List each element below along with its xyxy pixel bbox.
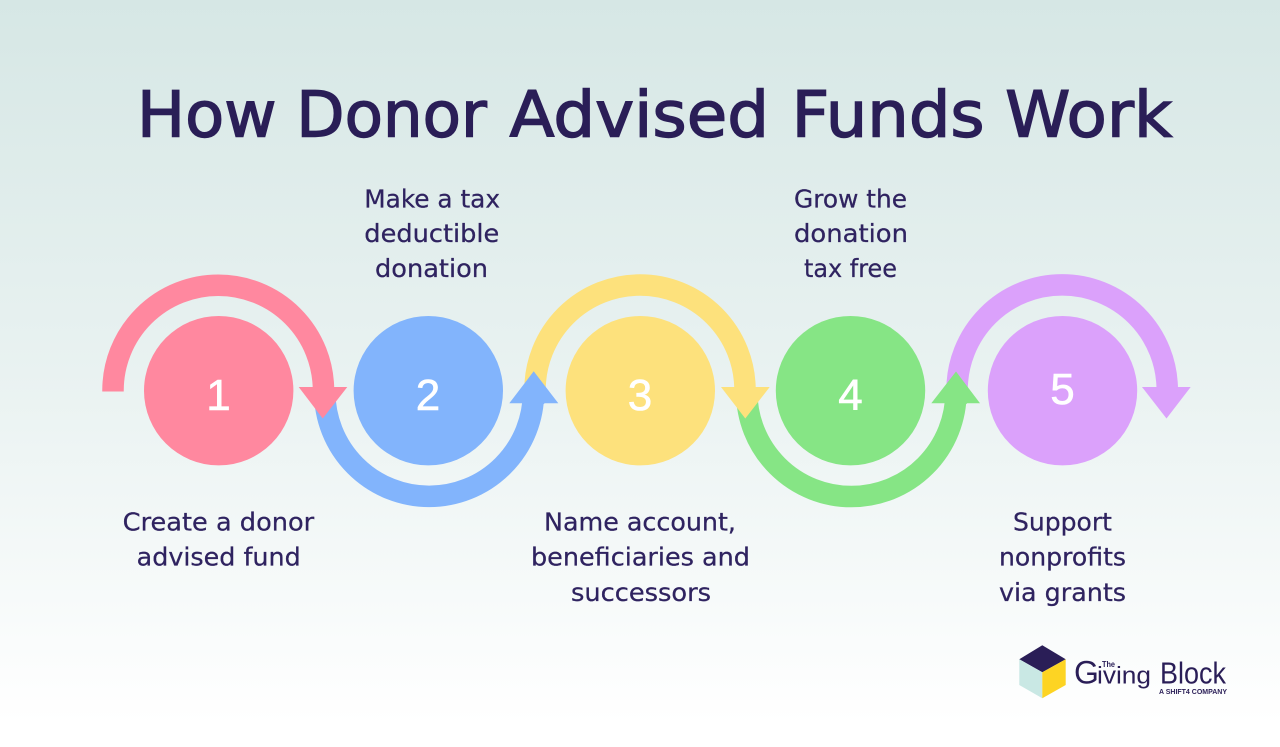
step 2 circle	[354, 316, 503, 465]
label: step 4: Grow the	[794, 184, 907, 213]
step 3 circle: 3	[628, 371, 652, 420]
label: step 5	[999, 508, 1126, 607]
label: step 5: nonprofits	[999, 543, 1126, 572]
label: step 5: via grants	[999, 578, 1126, 607]
title: Advised	[510, 79, 769, 152]
logo wordmark: G	[1074, 654, 1099, 690]
arrow 3: yellow arc	[535, 285, 770, 418]
logo wordmark	[1074, 654, 1227, 696]
arrow 2: blue arc	[325, 371, 558, 496]
logo wordmark: The	[1102, 660, 1115, 669]
label: step 2: Make a tax	[364, 184, 500, 213]
title	[137, 79, 1173, 152]
label: step 2	[364, 184, 500, 283]
step 5 circle	[988, 316, 1137, 465]
step 1 circle: 1	[206, 371, 231, 420]
label: step 4	[794, 184, 908, 283]
label: step 4: tax free	[804, 254, 897, 283]
title: Donor	[296, 79, 487, 152]
arrow 4: green arc	[747, 372, 980, 497]
label: step 5: Support	[1013, 508, 1112, 537]
title: How	[137, 79, 276, 152]
label: step 1: Create a donor	[123, 508, 315, 537]
logo wordmark: Block	[1160, 655, 1226, 690]
step 1 circle	[144, 316, 293, 465]
label: step 1	[123, 508, 315, 572]
logo wordmark: A SHIFT4 COMPANY	[1159, 689, 1227, 696]
arrow 1: pink arc	[113, 285, 347, 418]
label: step 1: advised fund	[137, 543, 301, 572]
label: step 2: deductible	[364, 219, 499, 248]
title: Work	[1005, 79, 1173, 152]
step 3 circle	[566, 316, 715, 465]
label: step 3: successors	[571, 578, 711, 607]
step 2 circle: 2	[416, 371, 440, 420]
label: step 2: donation	[375, 254, 488, 283]
label: step 3: Name account,	[544, 508, 736, 537]
step 5 circle: 5	[1050, 365, 1075, 414]
step 4 circle	[776, 316, 925, 465]
title: Funds	[792, 79, 985, 152]
label: step 3: beneficiaries and	[531, 543, 750, 572]
label: step 4: donation	[794, 219, 908, 248]
step 4 circle: 4	[838, 371, 863, 420]
logo: The Giving Block	[1019, 645, 1227, 698]
icon: cube	[1019, 645, 1066, 698]
logo wordmark: iving	[1097, 662, 1151, 689]
label: step 3	[531, 508, 750, 607]
arrow 5: purple arc	[957, 285, 1191, 418]
